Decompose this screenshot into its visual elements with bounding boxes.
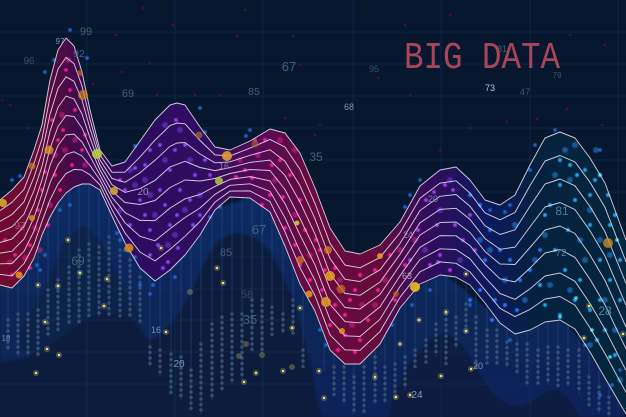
scattered numbers: 58 <box>241 289 253 301</box>
cyan particles <box>540 160 620 355</box>
scattered numbers: 20 <box>428 194 438 204</box>
dark hill: centre <box>0 233 322 417</box>
scattered numbers: 79 <box>553 71 562 80</box>
large translucent blue and cyan particles <box>480 145 620 380</box>
scattered numbers: 85 <box>220 247 232 259</box>
contour line 7 <box>0 152 626 370</box>
violet-pink particles: fourth hump <box>176 120 475 270</box>
scattered numbers: 97 <box>56 37 65 46</box>
scattered numbers: 68 <box>344 102 354 112</box>
scattered numbers: 95 <box>369 64 379 74</box>
red background particles <box>2 8 605 150</box>
scattered numbers: 69 <box>71 254 85 268</box>
pink particles: left hump <box>5 70 85 275</box>
scattered numbers: 28 <box>598 304 612 318</box>
scattered numbers: 81 <box>555 204 569 218</box>
scattered numbers: 97 <box>14 221 26 232</box>
contour line 8 <box>0 169 626 392</box>
large translucent pink particles <box>10 60 415 325</box>
scattered numbers: 20 <box>473 361 483 371</box>
scattered numbers: 73 <box>485 83 495 93</box>
contour line 5 <box>0 116 626 327</box>
scattered numbers: 24 <box>403 230 413 240</box>
blue layered hills behind ribbon <box>0 178 626 417</box>
scattered numbers: 69 <box>122 88 134 100</box>
violet particles: second hump <box>120 145 210 268</box>
title: BIG DATA: BIG DATA <box>404 37 560 80</box>
scattered numbers: 16 <box>151 325 161 335</box>
contour line 2 <box>0 57 626 268</box>
scattered numbers: 99 <box>80 26 92 38</box>
scattered numbers: 72 <box>555 248 567 259</box>
large translucent violet particles <box>120 125 460 260</box>
contour line 3 <box>0 77 626 284</box>
scattered numbers: 63 <box>402 271 412 281</box>
contour line 6 <box>0 134 626 349</box>
vertical data columns: dot stacks <box>8 237 609 417</box>
magenta particles: third hump and trough <box>236 140 405 352</box>
contour line 9 <box>0 184 626 414</box>
scattered numbers: 67 <box>282 59 296 74</box>
bright cyan sparks <box>560 175 617 357</box>
scattered numbers: 24 <box>411 390 423 401</box>
scattered numbers: 47 <box>520 87 530 98</box>
scattered numbers: 16 <box>219 161 229 171</box>
glowing yellow sparks <box>36 240 623 398</box>
scattered numbers: 96 <box>23 56 35 67</box>
dark hill: right <box>388 334 580 417</box>
scattered numbers: 20 <box>173 359 185 370</box>
scattered numbers: 35 <box>309 150 323 164</box>
contour line 1 <box>0 38 626 254</box>
vertical data columns: thin lines <box>8 180 609 417</box>
scattered numbers: 18 <box>2 334 11 343</box>
scattered numbers: 85 <box>248 86 260 98</box>
scattered numbers: 20 <box>137 187 149 198</box>
blue particles <box>470 195 540 320</box>
scattered numbers: 92 <box>73 48 85 60</box>
contour line 4 <box>0 96 626 305</box>
scattered numbers: 67 <box>252 222 266 237</box>
scattered numbers: 81 <box>497 44 507 54</box>
dark hill: left <box>20 224 150 350</box>
scattered numbers: 35 <box>243 312 257 327</box>
large orange and yellow data points <box>0 70 613 334</box>
